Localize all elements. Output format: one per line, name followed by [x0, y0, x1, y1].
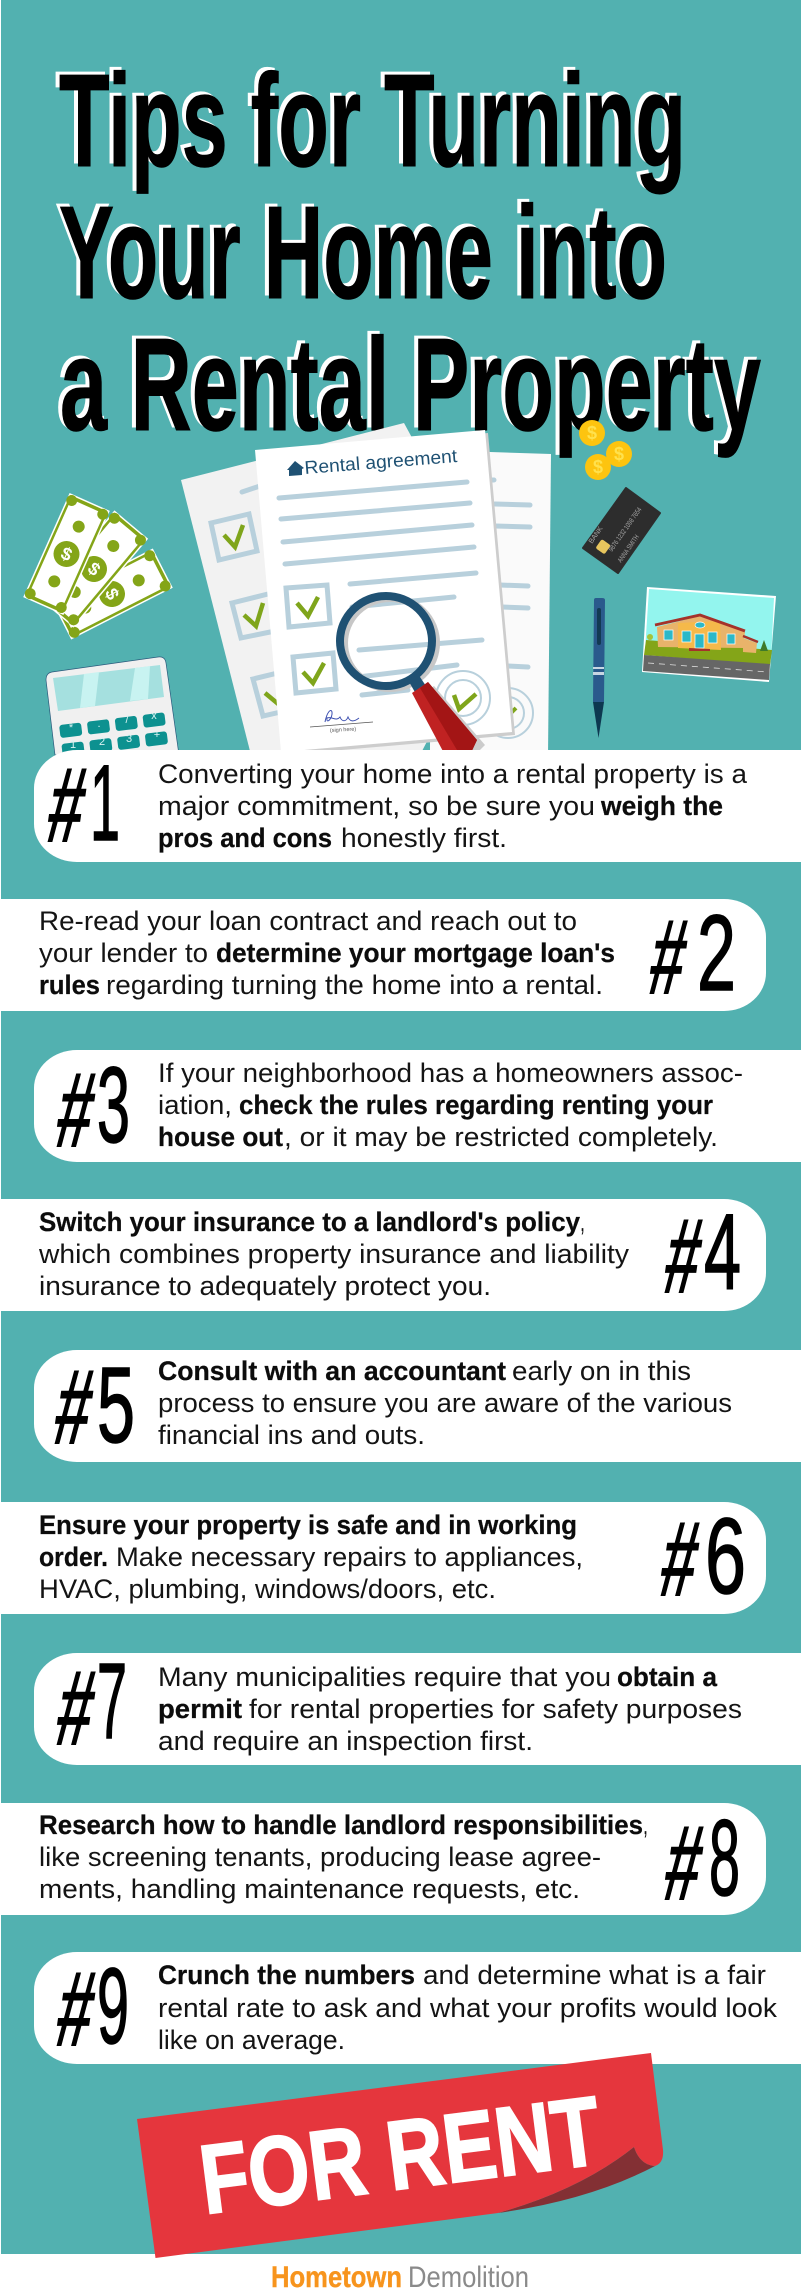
tip text: for rental properties for safety purposes — [249, 1694, 742, 1724]
panel background — [34, 1350, 801, 1462]
tip text: major commitment, so be sure you — [158, 791, 595, 821]
icon: calculator: + — [154, 729, 160, 741]
number badge: # — [654, 1498, 707, 1619]
tip text: rental rate to ask and what your profits would look — [158, 1993, 778, 2023]
panel: left back paper — [181, 423, 500, 755]
tip 8 — [0, 1797, 766, 1923]
tip text: your lender to — [39, 938, 208, 968]
panel background — [0, 1502, 766, 1614]
tip text: , — [643, 1810, 648, 1840]
tip text — [39, 1810, 648, 1904]
number badge: 6 — [705, 1495, 746, 1616]
icon: gold coins: $ — [587, 423, 597, 443]
tip text: Make necessary repairs to appliances, — [116, 1542, 583, 1572]
tip 1 — [34, 742, 801, 865]
number badge: 2 — [697, 892, 736, 1013]
tip 9 — [34, 1945, 801, 2069]
tip text — [158, 1960, 778, 2055]
sticker body — [137, 2053, 663, 2258]
icon: calculator: . — [97, 718, 101, 730]
number badge: # — [48, 1346, 101, 1467]
tip text: order. — [39, 1542, 108, 1572]
tip text: check the rules regarding renting your — [239, 1090, 713, 1120]
icon: calculator — [46, 657, 179, 776]
number badge: 8 — [709, 1797, 740, 1918]
for rent sticker — [137, 2053, 663, 2258]
tip text: pros and cons — [158, 823, 332, 853]
number badge: 4 — [704, 1191, 741, 1312]
tip text — [39, 1510, 583, 1604]
sticker label: FOR RENT — [194, 2075, 606, 2235]
tip 4 — [0, 1191, 766, 1316]
tip 3 — [34, 1044, 801, 1170]
panel background — [34, 750, 801, 862]
icon: gold coins — [579, 420, 632, 480]
number badge: # — [658, 1802, 711, 1923]
tip 6 — [0, 1495, 766, 1619]
tip text — [158, 1058, 743, 1152]
tip 2 — [0, 892, 766, 1017]
tip text: , or it may be restricted completely. — [284, 1122, 718, 1152]
tip text — [39, 906, 615, 1000]
number badge: # — [50, 1647, 103, 1768]
icon: money bills: $ — [58, 543, 75, 565]
icon: calculator: / — [125, 714, 129, 726]
icon: money bills — [23, 493, 173, 640]
tip text: regarding turning the home into a rental. — [106, 970, 603, 1000]
panel background — [0, 1199, 766, 1311]
tip 7: 7 — [97, 1640, 127, 1761]
tip text: Crunch the numbers — [158, 1960, 415, 1990]
number badge: # — [41, 744, 94, 865]
panel background — [0, 1803, 766, 1915]
icon: money bills: $ — [101, 585, 123, 603]
tip text: Research how to handle landlord responsibilities — [39, 1810, 643, 1840]
curled corner shadow — [498, 2147, 655, 2213]
tip text: determine your mortgage loan's — [216, 938, 615, 968]
tip 1: 1 — [90, 742, 120, 863]
number badge: # — [643, 896, 695, 1017]
tip text: which combines property insurance and liability — [38, 1239, 630, 1269]
icon: money bills: $ — [84, 558, 104, 580]
tip text — [38, 1207, 630, 1301]
tip text: house out — [158, 1122, 283, 1152]
tip text: Re-read your loan contract and reach out to — [39, 906, 577, 936]
tip 5 — [34, 1344, 801, 1467]
tip text: iation, — [158, 1090, 232, 1120]
icon: calculator: x — [151, 710, 157, 722]
tip text: and require an inspection first. — [158, 1726, 533, 1756]
icon: credit card: ANNA SMITH — [617, 534, 641, 564]
panel: right back paper — [430, 450, 551, 755]
tip text — [158, 1662, 742, 1756]
tip text: honestly first. — [341, 823, 507, 853]
tip text: like screening tenants, producing lease agree- — [39, 1842, 601, 1872]
panel: rental agreement front paper — [255, 430, 515, 755]
number badge: 3 — [97, 1044, 130, 1165]
panel background — [34, 1050, 801, 1162]
tip text: HVAC, plumbing, windows/doors, etc. — [39, 1574, 496, 1604]
tip text: ments, handling maintenance requests, etc. — [39, 1874, 580, 1904]
number badge: 9 — [97, 1945, 129, 2066]
seal with check — [436, 671, 490, 725]
tip text: insurance to adequately protect you. — [39, 1271, 491, 1301]
number badge: # — [50, 1948, 103, 2069]
tip text: early on in this — [512, 1356, 691, 1386]
footer band — [0, 2254, 801, 2289]
tip text — [158, 759, 748, 853]
tip text: Switch your insurance to a landlord's policy — [39, 1207, 580, 1237]
panel background — [0, 899, 766, 1011]
panel background — [34, 1952, 801, 2064]
tip text: If your neighborhood has a homeowners assoc- — [158, 1058, 743, 1088]
icon: house — [287, 461, 304, 476]
icon: credit card — [583, 488, 660, 573]
tip text: permit — [158, 1694, 242, 1724]
tip text: like on average. — [158, 2025, 345, 2055]
tip text — [158, 1356, 732, 1450]
icon: calculator: 3 — [126, 733, 132, 745]
icon: gold coins: $ — [593, 457, 603, 477]
signature — [310, 710, 373, 734]
tip text: Converting your home into a rental property is a — [158, 759, 748, 789]
tip 7 — [34, 1640, 801, 1768]
icon: calculator: * — [69, 722, 74, 734]
tip text: Consult with an accountant — [158, 1356, 506, 1386]
footer logo — [271, 2261, 529, 2289]
tip text: Many municipalities require that you — [158, 1662, 611, 1692]
tip text: weigh the — [600, 791, 723, 821]
number badge: # — [50, 1049, 103, 1170]
tip text: rules — [39, 970, 100, 1000]
icon: calculator: 2 — [99, 736, 105, 748]
icon: gold coins: $ — [614, 444, 624, 464]
icon: house photo — [642, 587, 776, 682]
icon: magnifying glass — [340, 596, 485, 755]
tip text: financial ins and outs. — [158, 1420, 425, 1450]
tip text: process to ensure you are aware of the various — [158, 1388, 732, 1418]
icon: pen — [593, 598, 605, 738]
tip text: , — [580, 1207, 585, 1237]
tip text: obtain a — [617, 1662, 718, 1692]
icon: credit card: BANK — [588, 525, 605, 545]
title — [55, 44, 761, 458]
number badge: # — [658, 1195, 710, 1316]
signature: (sign here) — [330, 727, 357, 734]
icon: credit card: 9876 1232 1098 7654 — [608, 506, 644, 553]
panel background — [34, 1653, 801, 1765]
tip text: and determine what is a fair — [423, 1960, 766, 1990]
tip text: Ensure your property is safe and in working — [39, 1510, 577, 1540]
number badge: 5 — [97, 1344, 135, 1465]
icon: calculator: 1 — [70, 739, 76, 751]
document heading: Rental agreement — [304, 445, 458, 478]
